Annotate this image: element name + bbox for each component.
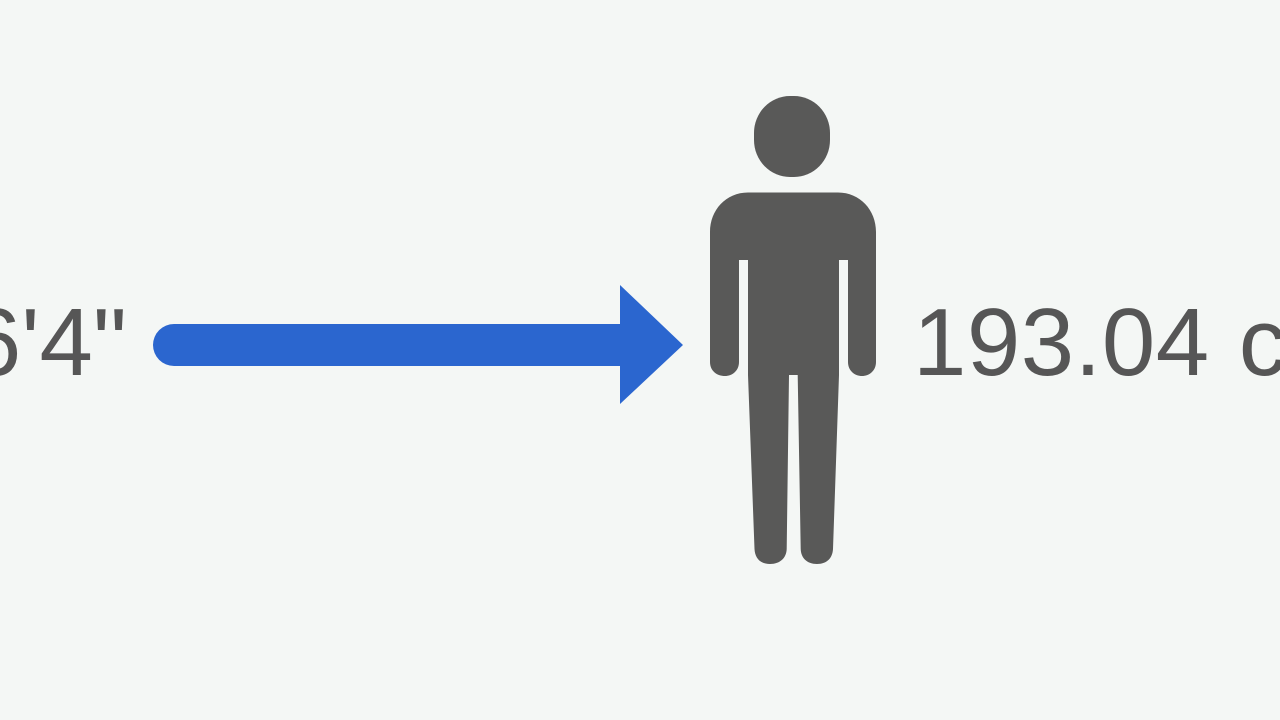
arrow pointing right to figure xyxy=(153,285,683,404)
icon: person body xyxy=(710,192,876,564)
icon: person head xyxy=(754,96,830,177)
icon: standing person xyxy=(710,96,876,564)
